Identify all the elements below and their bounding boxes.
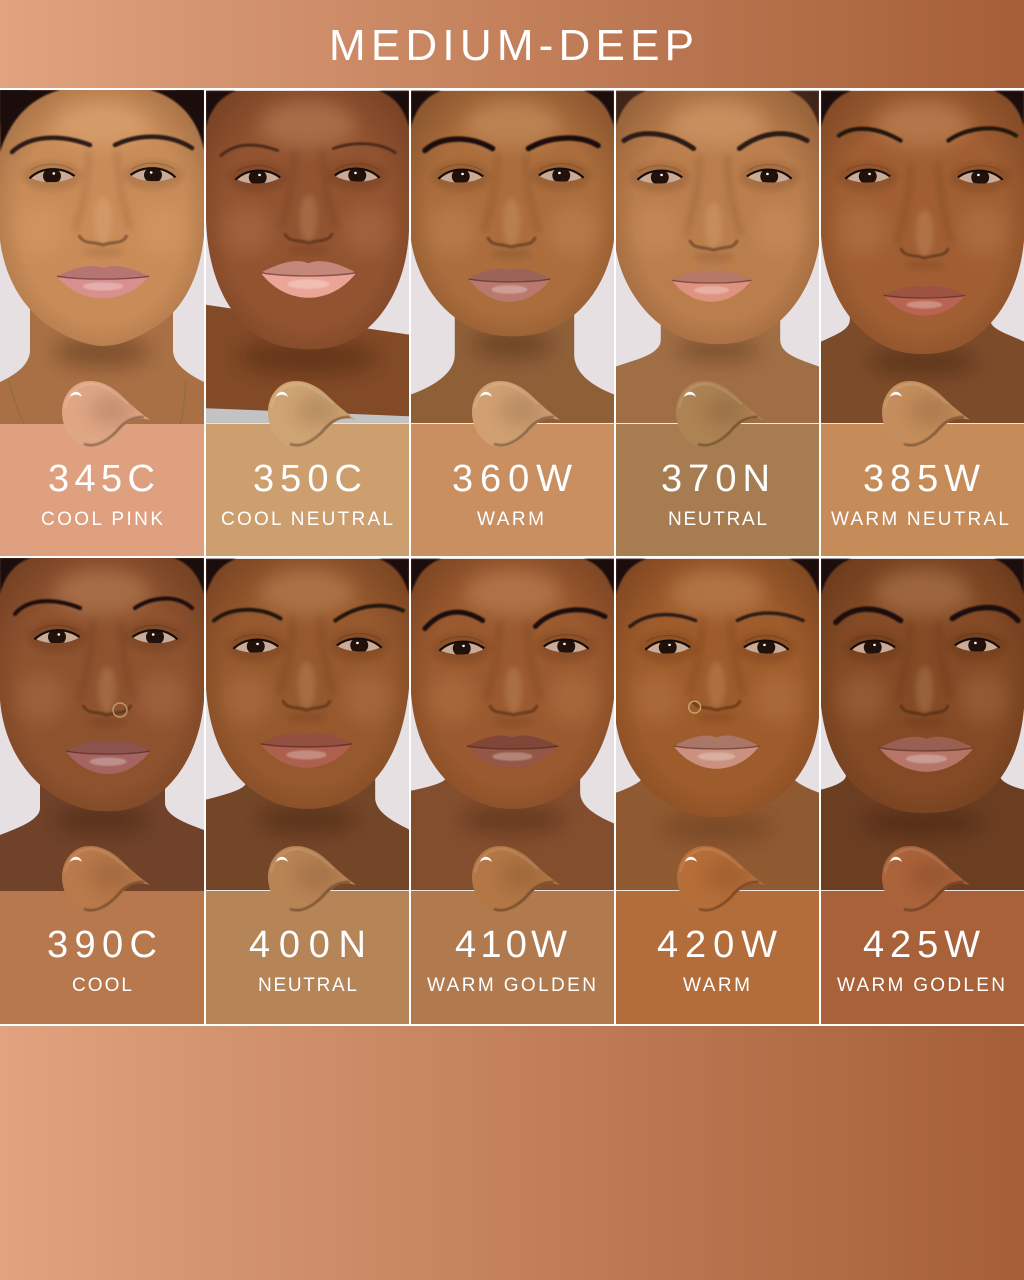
shade card: 385W [821, 91, 1024, 556]
shade card: 360W [411, 91, 614, 556]
foundation swatch [268, 381, 356, 447]
portrait: 360W [411, 90, 614, 424]
foundation swatch [676, 381, 764, 447]
shade name: WARM GOLDEN [427, 975, 596, 996]
title: MEDIUM-DEEP [329, 21, 694, 70]
portrait: 420W [616, 558, 819, 890]
shade code: 345C [48, 458, 155, 500]
swatch panel [206, 424, 409, 556]
shade code: 350C [253, 458, 362, 500]
shade name: WARM [683, 975, 750, 996]
shade card: 345C [0, 90, 204, 556]
portrait: 345C [0, 90, 204, 424]
foundation swatch [472, 381, 560, 447]
shade code: 370N [661, 458, 770, 500]
shade name: WARM NEUTRAL [831, 509, 1009, 530]
bottom gradient band [0, 1026, 1024, 1280]
portrait: 410W [411, 558, 614, 890]
shade card: 350C [206, 91, 409, 556]
shade code: 385W [863, 458, 980, 500]
shade card: 410W [411, 559, 614, 1024]
swatch panel [616, 424, 819, 556]
swatch panel [411, 424, 614, 556]
shade name: WARM GODLEN [837, 975, 1005, 996]
shade code: 390C [47, 924, 157, 966]
header band [0, 0, 1024, 88]
shade code: 400N [249, 924, 366, 966]
swatch panel [0, 424, 204, 556]
shade name: WARM [477, 509, 544, 530]
portrait: 425W [821, 558, 1024, 890]
shade card: 390C [0, 558, 204, 1024]
shade name: COOL PINK [41, 509, 163, 530]
foundation swatch [677, 846, 765, 912]
foundation swatch [268, 846, 356, 912]
foundation swatch [62, 846, 150, 912]
foundation swatch [882, 846, 970, 912]
shade code: 410W [455, 924, 567, 966]
shade name: NEUTRAL [668, 509, 767, 530]
shade card: 370N [616, 91, 819, 556]
portrait: 385W [821, 90, 1024, 424]
portrait: 370N [616, 90, 819, 424]
shade card: 420W [616, 559, 819, 1024]
shade card: 425W [821, 559, 1024, 1024]
swatch panel [616, 891, 819, 1024]
foundation swatch [882, 381, 970, 447]
shade name: NEUTRAL [258, 975, 357, 996]
portrait: 350C [206, 90, 409, 424]
swatch panel [206, 891, 409, 1024]
shade code: 420W [657, 924, 777, 966]
foundation swatch [62, 381, 150, 447]
foundation swatch [472, 846, 560, 912]
swatch panel [821, 424, 1024, 556]
shade code: 425W [863, 924, 980, 966]
portrait: 400N [206, 558, 409, 890]
swatch panel [0, 891, 204, 1024]
shade name: COOL [72, 975, 132, 996]
swatch panel [411, 891, 614, 1024]
shade card: 400N [206, 559, 409, 1024]
shade name: COOL NEUTRAL [221, 509, 393, 530]
swatch panel [821, 891, 1024, 1024]
shade code: 360W [452, 458, 572, 500]
portrait: 390C [0, 558, 204, 891]
